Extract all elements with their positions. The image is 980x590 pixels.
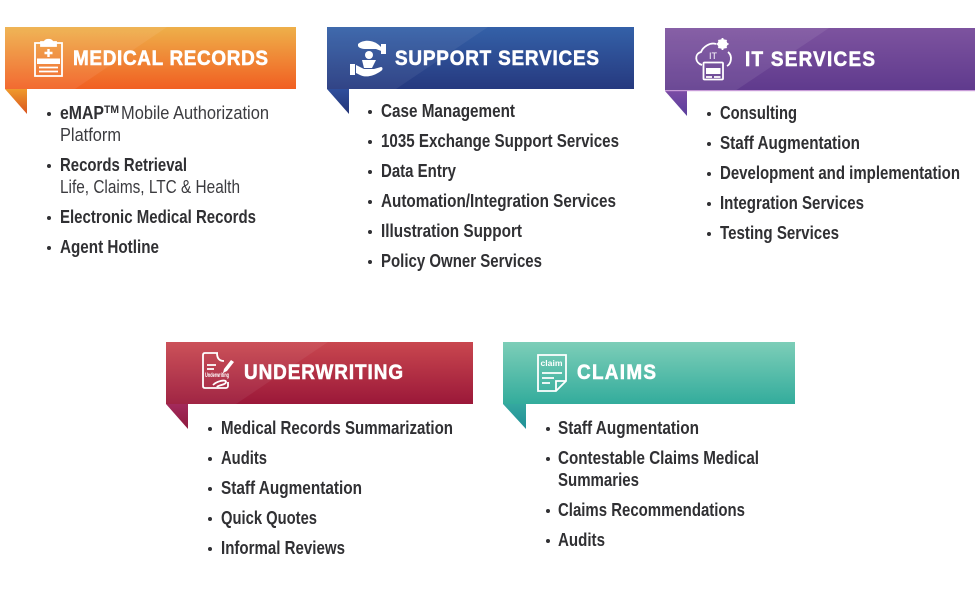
- icon: document with pen: Underwriting: [205, 373, 229, 379]
- heading: medical records: MEDICAL RECORDS: [73, 47, 268, 70]
- heading: claims: CLAIMS: [577, 361, 656, 384]
- list: support services: Policy Owner Services: [381, 250, 542, 271]
- icon: clipboard records: [35, 40, 62, 76]
- list: claims: Claims Recommendations: [558, 499, 745, 520]
- icon: claim document: claim: [540, 359, 562, 368]
- list: it services: Staff Augmentation: [720, 132, 860, 153]
- list: medical records: Platform: [60, 124, 121, 145]
- list: medical records: [47, 102, 269, 257]
- panel: underwriting: [166, 342, 473, 558]
- icon: cloud with gear and window: IT: [709, 51, 718, 61]
- list: it services: Integration Services: [720, 192, 864, 213]
- list: claims: [546, 417, 759, 550]
- banner: underwriting: [166, 342, 473, 429]
- list: support services: Automation/Integration Services: [381, 190, 616, 211]
- list: underwriting: [208, 417, 453, 558]
- list: support services: Data Entry: [381, 160, 457, 181]
- list: support services: Illustration Support: [381, 220, 522, 241]
- list: it services: Consulting: [720, 102, 797, 123]
- list: underwriting: Audits: [221, 447, 267, 468]
- list: medical records: Records Retrieval: [60, 154, 187, 175]
- list: support services: 1035 Exchange Support Services: [381, 130, 619, 151]
- list: medical records: Electronic Medical Records: [60, 206, 256, 227]
- heading: underwriting: UNDERWRITING: [244, 361, 403, 384]
- list: underwriting: Medical Records Summarization: [221, 417, 453, 438]
- list: support services: Case Management: [381, 100, 515, 121]
- heading: it services: IT SERVICES: [745, 48, 875, 71]
- list: it services: [707, 102, 960, 243]
- list: medical records: Life, Claims, LTC & Health: [60, 176, 240, 197]
- list: claims: Contestable Claims Medical: [558, 447, 759, 468]
- list: claims: Staff Augmentation: [558, 417, 699, 438]
- banner: claims: [503, 342, 795, 429]
- list: underwriting: Informal Reviews: [221, 537, 345, 558]
- list: underwriting: Staff Augmentation: [221, 477, 362, 498]
- list: medical records: eMAP: [60, 102, 104, 123]
- icon: document with pen: [203, 353, 234, 388]
- icon: hands: [350, 41, 386, 76]
- heading: support services: SUPPORT SERVICES: [395, 47, 599, 70]
- list: medical records: Mobile Authorization: [121, 102, 269, 123]
- list: underwriting: Quick Quotes: [221, 507, 317, 528]
- panel: medical records: [5, 27, 296, 257]
- panel: claims: [503, 342, 795, 550]
- banner: it services: [665, 28, 975, 116]
- banner: support services: [327, 27, 634, 114]
- panel: support services: [327, 27, 634, 271]
- panel: it services: [665, 28, 975, 243]
- list: medical records: Agent Hotline: [60, 236, 159, 257]
- list: support services: [368, 100, 619, 271]
- banner: medical records: [5, 27, 296, 114]
- icon: claim document: [538, 355, 566, 391]
- icon: cloud with gear and window: [696, 38, 731, 80]
- list: claims: Audits: [558, 529, 605, 550]
- list: it services: Testing Services: [720, 222, 839, 243]
- list: claims: Summaries: [558, 469, 639, 490]
- list: medical records: TM: [104, 104, 119, 116]
